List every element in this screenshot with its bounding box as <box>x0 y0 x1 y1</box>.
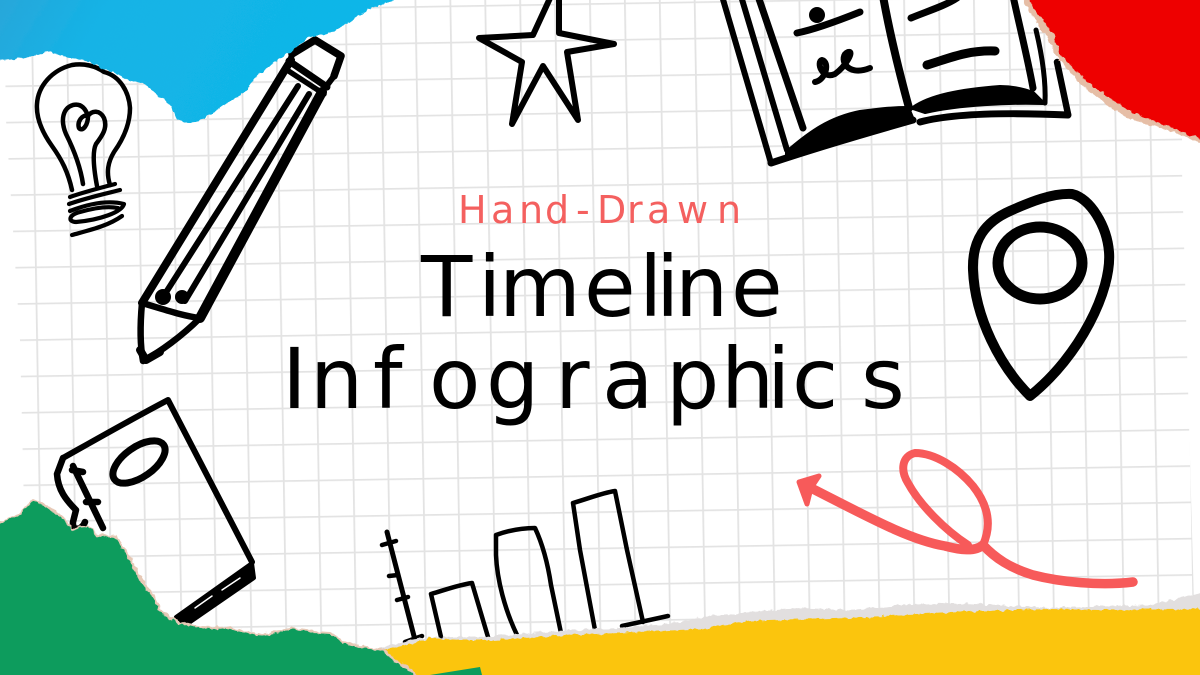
icon: location pin <box>973 194 1109 396</box>
icon: pencil <box>140 40 341 361</box>
icon: spiral notebook <box>57 400 254 625</box>
torn paper: red corner <box>1018 0 1200 146</box>
torn paper: blue corner <box>0 0 400 124</box>
subtitle: Hand-Drawn <box>458 188 741 232</box>
title line one: Timeline <box>420 238 783 336</box>
icon: hand-drawn bar chart <box>382 491 668 642</box>
icon: light bulb <box>37 64 130 235</box>
torn paper: yellow strip <box>380 591 1200 675</box>
arrow: looping red arrow <box>799 453 1133 584</box>
icon: open book <box>722 0 1068 163</box>
icon: star <box>479 0 614 124</box>
book scribble: right page <box>911 0 995 65</box>
torn paper: green corner <box>0 499 482 675</box>
title line two: Infographics <box>282 330 905 428</box>
book scribble: left page <box>797 7 870 82</box>
